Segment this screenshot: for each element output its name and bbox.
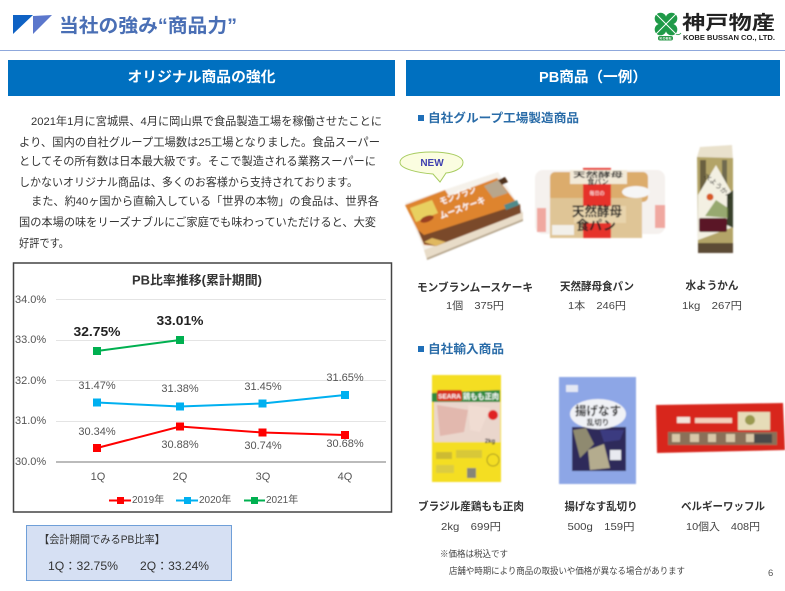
y axis labels: 34.0%: [15, 294, 46, 306]
product image: natural yeast bread: 毎日の: [589, 190, 605, 197]
series 2021: 32.75%: [74, 325, 120, 339]
y axis labels: 31.0%: [15, 415, 46, 427]
title: 当社の強み“商品力”: [59, 15, 237, 37]
x axis labels: 1Q: [91, 471, 106, 483]
legend: 2020年: [199, 493, 231, 506]
product labels: imported: 10個入 408円: [686, 520, 760, 533]
body text: としてその所有数は日本最大級です。そこで製造される業務スーパーに: [19, 154, 376, 168]
x axis labels: 3Q: [256, 471, 271, 483]
product image: Brazilian chicken thigh: 2kg: [485, 439, 496, 445]
product image: Mont Blanc mousse cake: モンブラン: [438, 184, 477, 207]
product labels: imported: [418, 499, 765, 533]
callout: fiscal period PB ratio: [26, 526, 232, 580]
product labels: imported: 揚げなす乱切り: [564, 499, 638, 513]
logo: Kobe Bussan: 神戸物産: [682, 12, 775, 34]
callout: NEW badge: [400, 152, 463, 182]
series 2019: 30.34%: [78, 426, 116, 438]
y axis labels: [15, 294, 46, 468]
legend: 2019年: [132, 493, 164, 506]
x axis labels: [91, 471, 353, 483]
series 2019: 30.68%: [326, 438, 364, 450]
product labels: imported: 2kg 699円: [441, 521, 501, 533]
product labels: factory: 天然酵母食パン: [560, 279, 634, 293]
chart title: PB比率推移(累計期間): [132, 272, 262, 288]
body text: 2021年1月に宮城県、4月に岡山県で食品製造工場を稼働させたことに: [31, 114, 382, 128]
footnote: [440, 548, 685, 576]
y axis labels: 33.0%: [15, 334, 46, 346]
y axis labels: 32.0%: [15, 375, 46, 387]
callout: fiscal period PB ratio: 2Q：33.24%: [140, 559, 209, 573]
product image: mizu yokan: 水ようかん: [702, 171, 735, 201]
series 2020: 31.65%: [326, 372, 364, 384]
y axis labels: 30.0%: [15, 456, 46, 468]
series 2020: 31.47%: [78, 380, 116, 392]
footnote: 店舗や時期により商品の取扱いや価格が異なる場合があります: [449, 565, 685, 576]
product labels: factory: [417, 278, 742, 312]
right panel heading: [406, 60, 780, 96]
product image: fried eggplant: 揚げなす: [575, 403, 621, 418]
logo: Kobe Bussan: KOBE: [660, 37, 672, 41]
product labels: factory: 1本 246円: [568, 299, 626, 312]
body text: 好評です。: [19, 236, 69, 250]
left panel heading: [8, 60, 395, 96]
x axis labels: 4Q: [338, 471, 353, 483]
series 2019: 30.74%: [244, 440, 282, 452]
product image: natural yeast bread: 食パン: [576, 218, 616, 233]
product image: Brazilian chicken thigh: SEARA: [438, 394, 461, 400]
product labels: imported: ブラジル産鶏もも正肉: [418, 499, 524, 513]
product image: Mont Blanc mousse cake: ムースケーキ: [438, 195, 487, 221]
series 2019: 30.88%: [161, 439, 199, 451]
product labels: factory: モンブランムースケーキ: [417, 280, 533, 294]
product image: Brazilian chicken thigh: 鶏もも正肉: [463, 391, 499, 401]
logo: Kobe Bussan: [655, 12, 775, 42]
product image: Mont Blanc mousse cake: [405, 172, 523, 260]
product image: Belgian waffle: [656, 403, 785, 453]
section heading: group factory products: 自社グループ工場製造商品: [428, 110, 579, 125]
body text: また、約40ヶ国から直輸入している「世界の本物」の食品は、世界各: [31, 194, 379, 208]
body text: [19, 114, 382, 250]
product image: mizu yokan: [697, 145, 735, 253]
series 2021: [74, 314, 204, 355]
product labels: factory: 水ようかん: [686, 278, 738, 292]
series 2019: [78, 422, 364, 452]
product labels: imported: 500g 159円: [568, 521, 634, 533]
series 2020: [78, 372, 364, 410]
legend: [109, 493, 298, 506]
x axis labels: 2Q: [173, 471, 188, 483]
product image: natural yeast bread: 天然酵母: [572, 204, 622, 219]
body text: より、国内の自社グループ工場数は25工場となりました。食品スーパー: [19, 135, 380, 149]
product image: natural yeast bread: 天然酵母: [573, 170, 623, 179]
legend: 2021年: [266, 493, 298, 506]
callout: fiscal period PB ratio: 1Q：32.75%: [48, 559, 118, 573]
product image: natural yeast bread: 食パン: [587, 177, 609, 186]
series 2020: 31.45%: [244, 381, 282, 393]
right panel heading: PB商品（一例）: [539, 69, 647, 86]
section heading: imported products: 自社輸入商品: [428, 341, 504, 356]
panel: PB ratio line chart: [14, 263, 392, 512]
product labels: imported: ベルギーワッフル: [681, 500, 765, 513]
product labels: factory: 1個 375円: [446, 299, 504, 312]
body text: 国の本場の味をリーズナブルにご家庭でも味わっていただけると、大変: [19, 215, 376, 229]
callout: fiscal period PB ratio: 【会計期間でみるPB比率】: [39, 532, 165, 546]
page number: 6: [768, 568, 773, 579]
product image: Brazilian chicken thigh: [432, 375, 501, 482]
series 2021: 33.01%: [156, 314, 204, 328]
product image: fried eggplant: [559, 377, 636, 484]
series 2020: 31.38%: [161, 383, 199, 395]
left panel heading: オリジナル商品の強化: [128, 69, 276, 86]
header icon: double triangles: [13, 15, 52, 34]
body text: しかないオリジナル商品は、多くのお客様から支持されております。: [19, 175, 358, 189]
logo: Kobe Bussan: KOBE BUSSAN CO., LTD.: [683, 33, 775, 42]
footnote: ※価格は税込です: [440, 548, 508, 559]
product image: natural yeast bread: [535, 168, 665, 238]
callout: NEW badge: NEW: [420, 158, 444, 169]
product image: fried eggplant: 乱切り: [587, 417, 609, 427]
product labels: factory: 1kg 267円: [682, 300, 742, 312]
